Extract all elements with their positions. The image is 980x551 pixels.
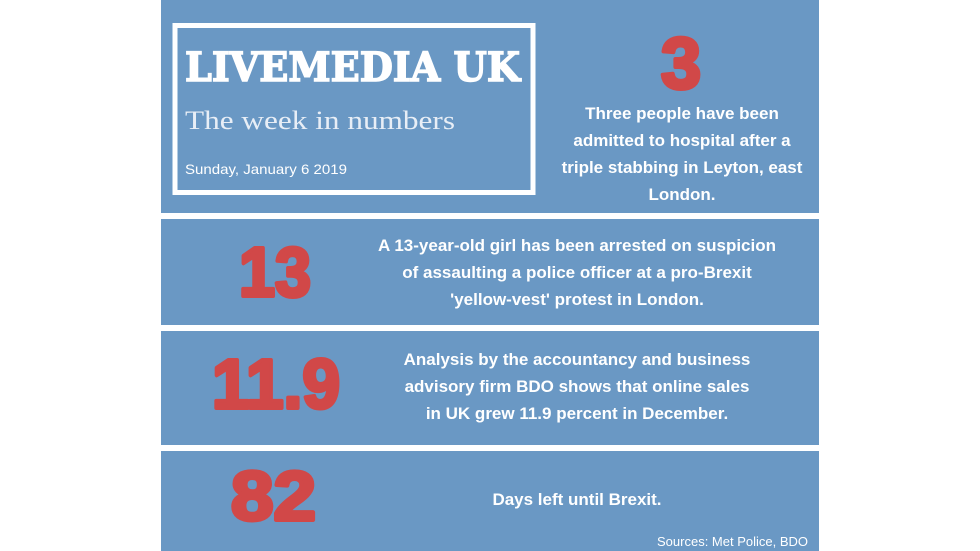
text: stabbing: triple stabbing in Leyton, east xyxy=(562,158,803,177)
number: 13: 13 xyxy=(239,233,311,311)
text: brexit: Days left until Brexit. xyxy=(492,490,662,509)
date: Sunday, January 6 2019 xyxy=(185,161,347,177)
panel: header xyxy=(161,0,819,213)
panel: 82 xyxy=(161,451,819,551)
text: arrest: A 13-year-old girl has been arrested on suspicion xyxy=(378,236,776,255)
text: online sales: advisory firm BDO shows that online sales xyxy=(405,377,749,396)
text: stabbing: Three people have been xyxy=(585,104,779,123)
text: stabbing: London. xyxy=(648,185,716,204)
text: stabbing: admitted to hospital after a xyxy=(573,131,791,150)
text: online sales: Analysis by the accountancy and business xyxy=(404,350,750,369)
number: 11.9: 11.9 xyxy=(212,345,340,423)
title: LIVEMEDIA UK xyxy=(185,44,521,91)
subtitle: The week in numbers xyxy=(185,106,455,135)
panel: 11.9 xyxy=(161,331,819,445)
number: 3: 3 xyxy=(661,24,701,104)
panel: 13 xyxy=(161,219,819,325)
text: arrest: of assaulting a police officer at a pro-Brexit xyxy=(402,263,752,282)
number: 82: 82 xyxy=(231,457,316,535)
text: online sales: in UK grew 11.9 percent in December. xyxy=(426,404,728,423)
title box xyxy=(175,26,533,192)
text: arrest: 'yellow-vest' protest in London. xyxy=(450,290,704,309)
sources: Sources: Met Police, BDO xyxy=(657,534,808,549)
